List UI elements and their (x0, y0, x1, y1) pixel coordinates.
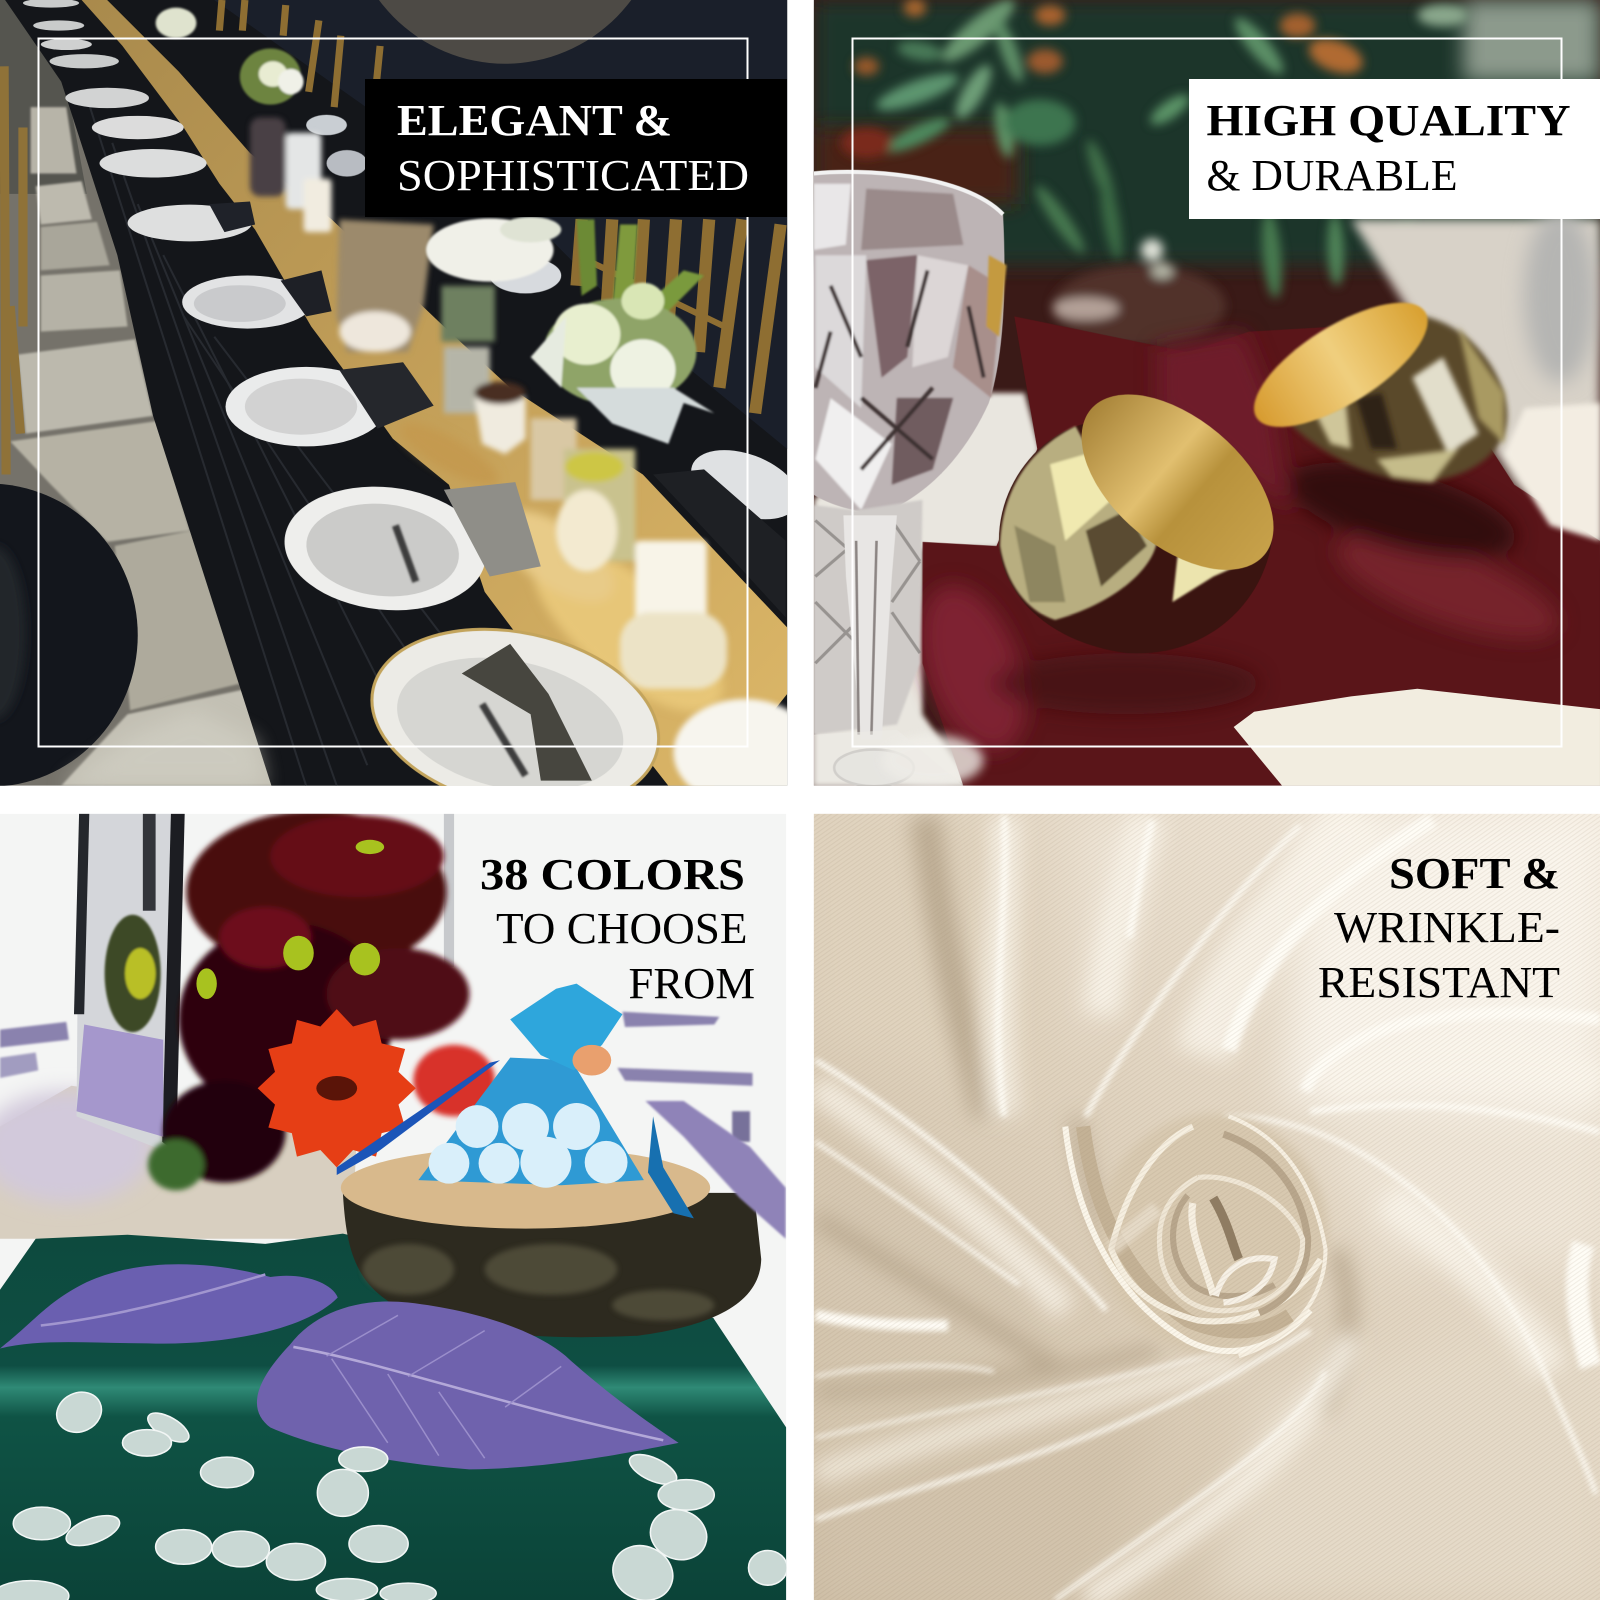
photo: long black table with gold runner (0, 0, 816, 834)
emerald satin runner (0, 1234, 786, 1600)
broad shaded folds (814, 814, 1600, 1600)
left chair cushions (10, 107, 276, 786)
label: soft and wrinkle-resistant: WRINKLE- (1334, 903, 1560, 952)
red-orange gerbera (258, 1009, 495, 1167)
central rosette (1065, 1114, 1328, 1356)
label: elegant and sophisticated: SOPHISTICATED (397, 151, 749, 200)
photo: crystal goblet and gold votives on burgundy runner (814, 0, 1600, 786)
table ribs (87, 97, 459, 786)
panel: soft and wrinkle-resistant (814, 814, 1600, 1600)
greenery backdrop (814, 0, 1600, 265)
dark red flower mass (148, 810, 469, 1190)
left gold chair backs (4, 66, 23, 474)
runner sheen (901, 332, 1570, 766)
label: elegant and sophisticated: ELEGANT & (397, 96, 672, 145)
green sprig in frame (105, 915, 161, 1032)
label: high quality and durable: & DURABLE (1206, 151, 1458, 200)
label: high quality and durable: HIGH QUALITY (1206, 96, 1570, 145)
label: soft and wrinkle-resistant: RESISTANT (1318, 958, 1560, 1007)
label: high quality and durable (1189, 79, 1600, 219)
night background behind table (214, 0, 787, 449)
panel: 38 colors to choose from (0, 810, 787, 1600)
photo: champagne satin swirl (814, 814, 1600, 1600)
crystal goblet (814, 172, 1007, 786)
purple sheer leaf right (645, 1101, 786, 1239)
candles, glasses and vases (250, 117, 816, 806)
label: 38 colors to choose from: TO CHOOSE (496, 904, 748, 953)
grey dome (379, 0, 631, 64)
leaves and orange berries (841, 0, 1468, 299)
plate lettering and napkins (209, 202, 786, 781)
white flower arrangements (156, 8, 714, 444)
black table (5, 0, 787, 786)
panel: high quality and durable (814, 0, 1600, 786)
goblet stem and foot (843, 515, 897, 740)
label: soft and wrinkle-resistant (1318, 849, 1560, 1007)
light haze bottom (65, 720, 276, 786)
purple leaf center (257, 1301, 679, 1469)
photo: green runner with purple leaves and diamonds (0, 810, 787, 1600)
purple leaf left (0, 1264, 338, 1348)
satin highlights (815, 815, 1600, 1600)
panel: elegant and sophisticated (0, 0, 816, 834)
twill texture (814, 814, 1600, 1600)
blurred vase (1053, 239, 1226, 347)
burgundy runner (922, 311, 1600, 786)
label: elegant and sophisticated (365, 79, 787, 217)
label: soft and wrinkle-resistant: SOFT & (1389, 849, 1560, 898)
gold chairs back side (219, 0, 781, 413)
dinner plates (23, 0, 808, 834)
yellow-green flower centres (196, 840, 384, 999)
label: 38 colors to choose from (480, 850, 755, 1008)
first gold votive (998, 394, 1274, 654)
label: 38 colors to choose from: FROM (628, 959, 755, 1008)
soft broad satin sheen (815, 815, 1600, 1600)
gold runner (82, 0, 787, 786)
white table right (1351, 219, 1600, 561)
burlap and tulle (0, 1086, 357, 1239)
wood slice (341, 1147, 761, 1337)
decorative frame (852, 38, 1562, 746)
acrylic diamonds (0, 1385, 787, 1600)
blue organza bag (337, 984, 694, 1218)
second gold votive (1252, 301, 1512, 486)
runner highlights (400, 426, 724, 712)
black hat (0, 484, 138, 787)
white balls in bag (429, 1103, 628, 1188)
dark creases (815, 815, 1348, 1412)
decorative frame (38, 38, 748, 746)
white linen left (814, 393, 1040, 786)
lilac place setting streaks (0, 1012, 753, 1142)
cut crystal base behind (814, 500, 922, 735)
cream napkins (1504, 403, 1600, 541)
silver mirror frame (74, 814, 454, 1155)
label: 38 colors to choose from: 38 COLORS (480, 850, 745, 899)
